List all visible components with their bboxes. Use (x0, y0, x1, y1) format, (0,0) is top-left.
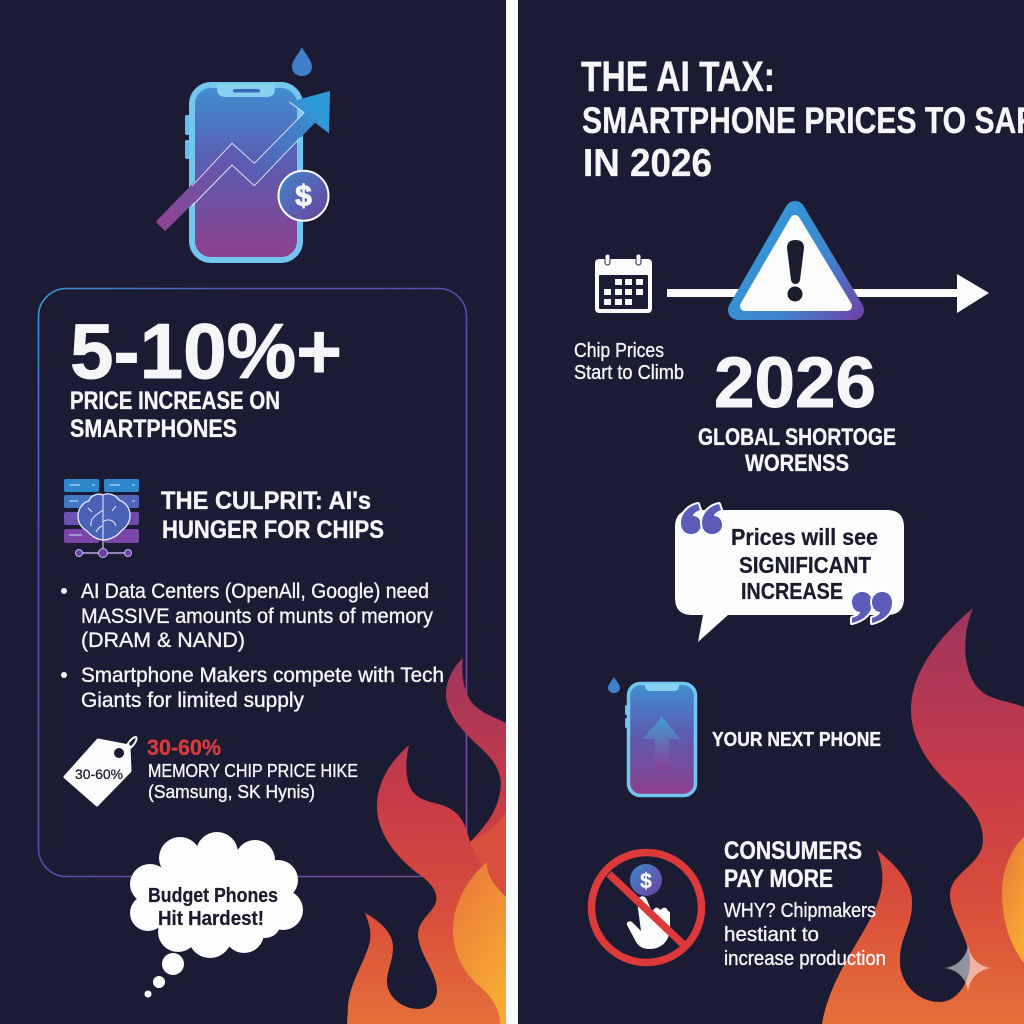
title (581, 53, 1024, 185)
label: chip prices: Chip Prices (574, 340, 664, 362)
label: global shortage (698, 424, 896, 477)
icon: calendar (595, 254, 652, 313)
label: your next phone: YOUR NEXT PHONE (712, 729, 881, 751)
icon: no payment sign (592, 852, 702, 962)
panel: stats frame (38, 288, 466, 876)
label: chip prices (574, 340, 684, 384)
title: THE AI TAX: (581, 53, 775, 101)
bullet list: AI Data Centers (OpenAll, Google) need (81, 580, 429, 603)
thought cloud: Hit Hardest! (158, 908, 264, 930)
flames: left panel (347, 658, 506, 1024)
bullet list: Smartphone Makers compete with Tech (81, 664, 444, 687)
bullet list: MASSIVE amounts of munts of memory (81, 605, 433, 628)
label: global shortage: GLOBAL SHORTOGE (698, 424, 896, 451)
divider: white gutter (506, 0, 518, 1024)
heading: the culprit (161, 487, 384, 544)
speech bubble: Prices will see (731, 524, 878, 550)
speech bubble: SIGNIFICANT (739, 552, 871, 578)
consumers pay more: CONSUMERS (724, 837, 862, 865)
drop (292, 47, 312, 76)
icon: price tag (65, 737, 137, 805)
consumers pay more: increase production (724, 948, 886, 970)
heading: the culprit: THE CULPRIT: AI's (161, 487, 371, 515)
memory price hike (147, 735, 358, 802)
consumers pay more: WHY? Chipmakers (724, 900, 876, 922)
icon: phone with rising arrow (156, 47, 330, 260)
headline stat: PRICE INCREASE ON (70, 387, 280, 415)
closing quotes (852, 592, 892, 623)
year 2026: 2026 (714, 344, 876, 423)
title: IN 2026 (583, 142, 712, 185)
bullet list (61, 580, 444, 712)
bullet list: Giants for limited supply (81, 689, 304, 712)
label: global shortage: WORENSS (745, 450, 849, 477)
dollar coin (278, 171, 328, 221)
arrow (156, 91, 330, 231)
icon: sparkle watermark (944, 944, 992, 992)
consumers pay more: PAY MORE (724, 865, 833, 893)
icon: no payment sign: $ (640, 870, 652, 893)
speech bubble: INCREASE (741, 578, 843, 604)
phone body (185, 84, 300, 260)
icon: price tag: 30-60% (75, 767, 123, 782)
label: chip prices: Start to Climb (574, 362, 684, 384)
headline stat: 5-10%+ (70, 307, 342, 395)
heading: the culprit: HUNGER FOR CHIPS (162, 516, 384, 544)
memory price hike: MEMORY CHIP PRICE HIKE (148, 760, 358, 781)
headline stat (70, 307, 342, 443)
icon: next phone (608, 677, 696, 796)
dollar coin: $ (295, 180, 312, 213)
thought cloud (130, 832, 303, 998)
consumers pay more (724, 837, 886, 970)
bullet list: (DRAM & NAND) (81, 629, 245, 652)
speech bubble (675, 504, 904, 642)
consumers pay more: hestiant to (724, 924, 819, 946)
thought cloud: Budget Phones (148, 885, 278, 907)
icon: AI brain and servers (64, 479, 139, 558)
headline stat: SMARTPHONES (70, 415, 237, 443)
opening quotes (681, 504, 722, 534)
memory price hike: (Samsung, SK Hynis) (148, 781, 315, 802)
flames: right panel (822, 608, 1024, 1024)
memory price hike: 30-60% (147, 735, 221, 760)
timeline arrow (667, 274, 989, 313)
icon: warning triangle (738, 211, 854, 310)
